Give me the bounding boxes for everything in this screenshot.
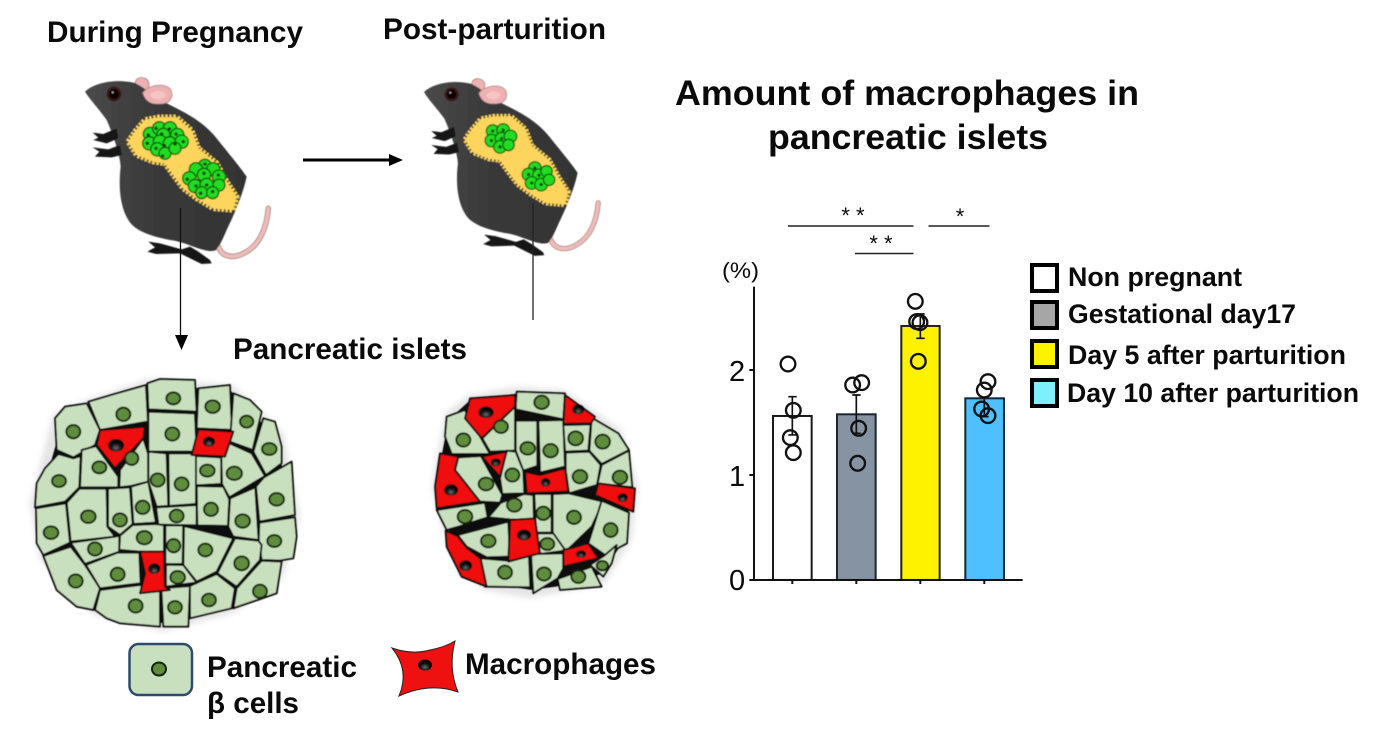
- significance markers: * *: [841, 203, 865, 228]
- label: Pancreatic beta cells: β cells: [207, 687, 299, 720]
- chart legend: [1032, 262, 1359, 408]
- bar: non pregnant: [773, 416, 812, 580]
- line: post-parturition mouse to islet: [532, 203, 534, 320]
- diagram: islet during pregnancy: [30, 378, 300, 632]
- y axis tick labels: 1: [729, 461, 745, 493]
- label: Pancreatic beta cells: [207, 651, 357, 720]
- legend: macrophages: [392, 641, 656, 696]
- diagram: islet post-parturition: [432, 387, 638, 598]
- y axis tick labels: [729, 356, 745, 597]
- arrow: pregnancy mouse to islet: [175, 208, 188, 350]
- bar: day 5 after parturition: [901, 326, 940, 580]
- data points: [781, 294, 995, 471]
- icon: macrophage: [392, 641, 458, 696]
- bar: day 10 after parturition: [965, 398, 1004, 580]
- label: Pancreatic beta cells: Pancreatic: [207, 651, 357, 684]
- significance markers: [788, 203, 990, 256]
- y axis tick labels: 2: [729, 356, 745, 388]
- error bars: [788, 314, 989, 435]
- significance markers: * *: [869, 231, 893, 256]
- heading: Pancreatic islets: Pancreatic islets: [233, 333, 467, 366]
- chart title: [675, 74, 1139, 157]
- y axis tick labels: 0: [729, 565, 745, 597]
- bar chart: macrophage amount: [722, 203, 1023, 597]
- legend item: Non pregnant: Non pregnant: [1068, 262, 1242, 292]
- heading: During Pregnancy: During Pregnancy: [47, 16, 303, 49]
- label: Macrophages: Macrophages: [465, 648, 656, 681]
- heading: Post-parturition: Post-parturition: [383, 13, 606, 46]
- legend item: Day 5 after parturition: Day 5 after parturition: [1068, 340, 1346, 370]
- arrow: pregnancy to post-parturition: [303, 154, 403, 166]
- significance markers: *: [956, 204, 965, 229]
- legend: pancreatic beta cell: [130, 644, 357, 720]
- icon: post-parturition mouse: [424, 79, 598, 256]
- chart title: pancreatic islets: [768, 118, 1048, 157]
- y axis title: (%): [722, 258, 759, 283]
- icon: pregnant mouse: [85, 78, 268, 264]
- legend item: Day 10 after parturition: Day 10 after parturition: [1067, 378, 1359, 408]
- bar: gestational day 17: [837, 414, 876, 580]
- legend item: Gestational day17: Gestational day17: [1068, 299, 1296, 329]
- axes: [749, 287, 1023, 584]
- chart title: Amount of macrophages in: [675, 74, 1139, 113]
- icon: beta cell: [130, 644, 192, 695]
